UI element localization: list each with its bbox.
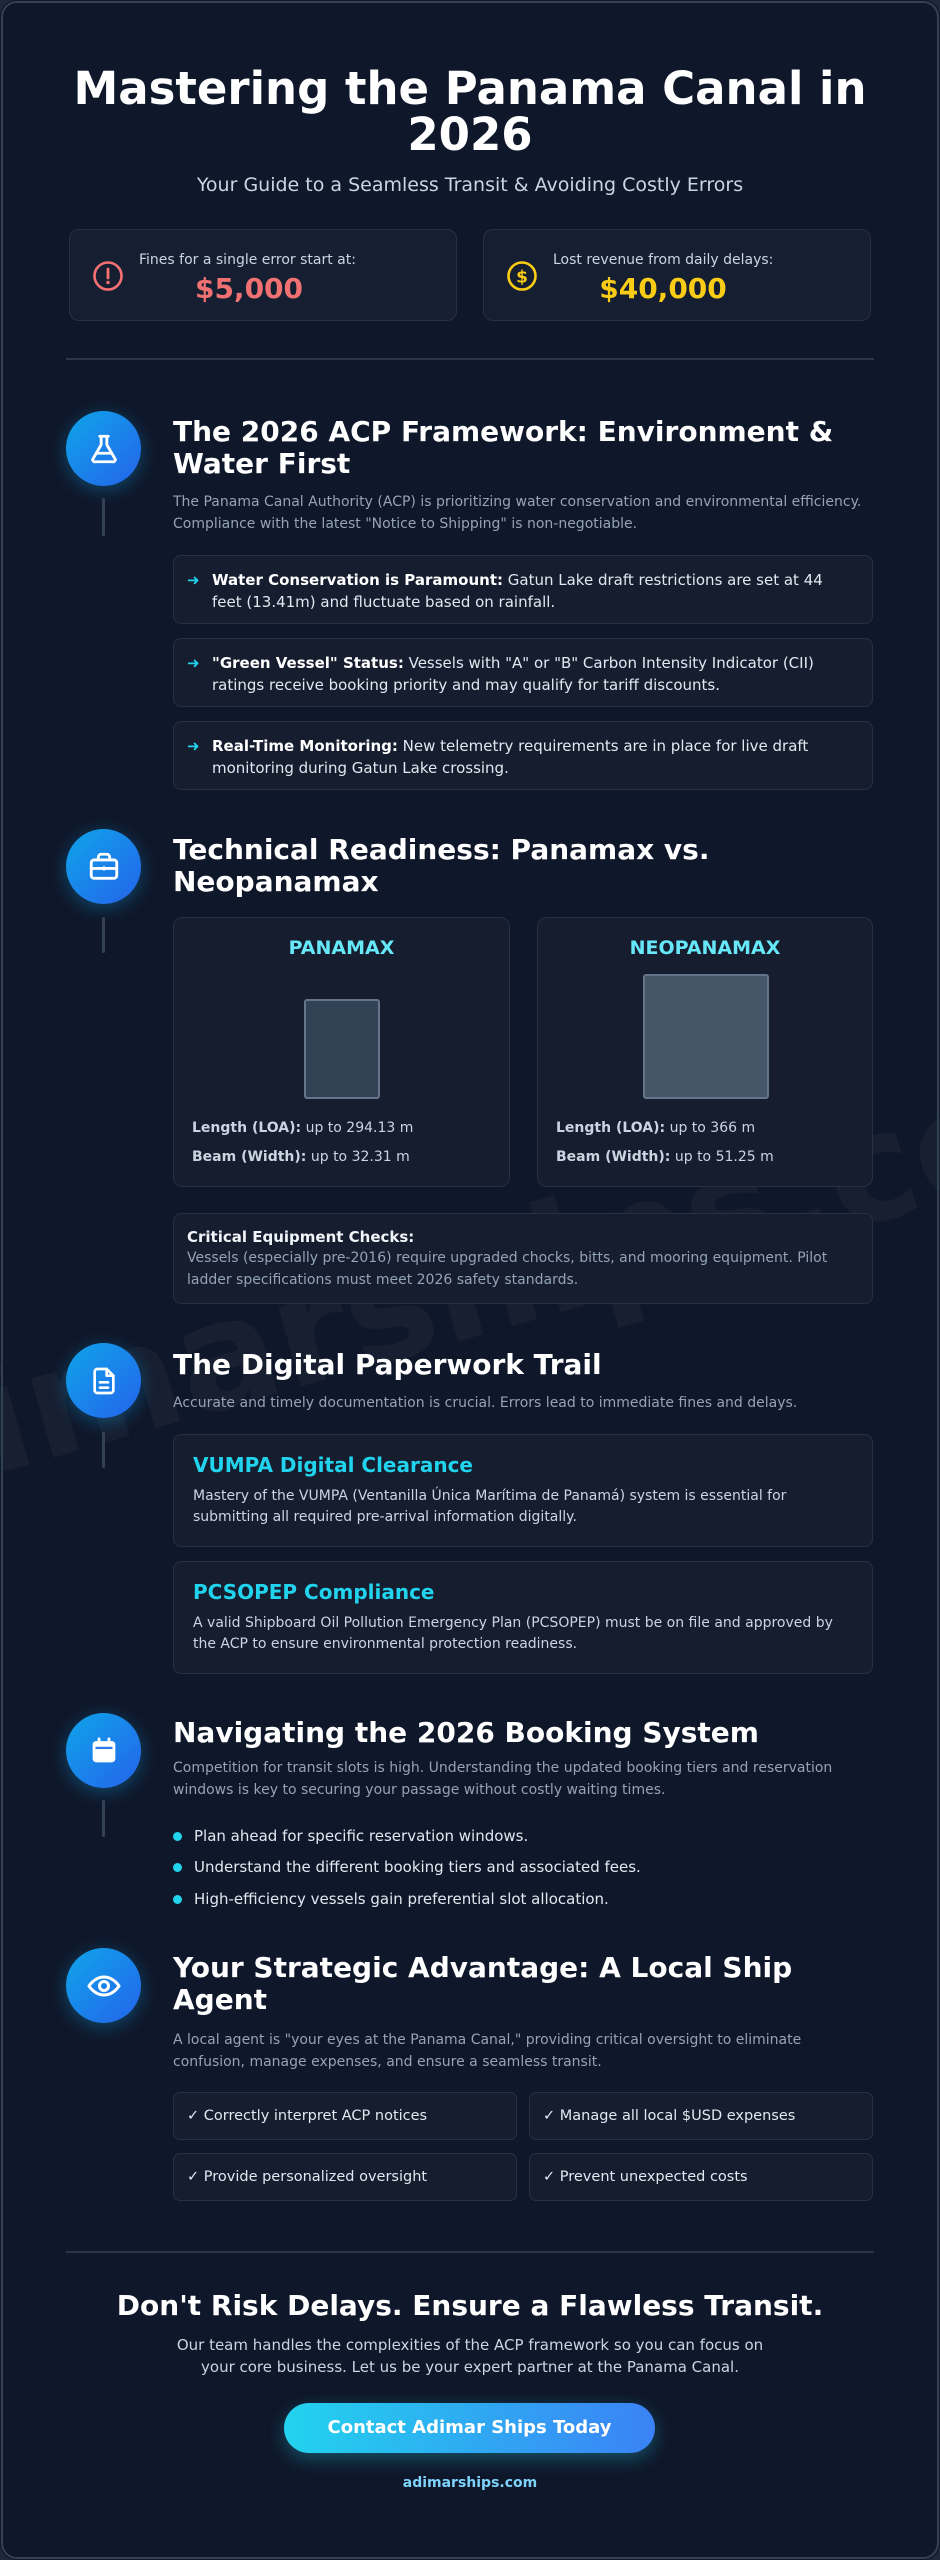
ship size: panamax xyxy=(304,999,380,1099)
icon: alert xyxy=(93,261,123,291)
card: panamax: Length (LOA): up to 294.13 m xyxy=(192,1120,413,1136)
bullet box: green vessel: "Green Vessel" Status: Vessels with "A" or "B" Carbon Intensity Indicator (CII) ratings receive booking priority and may qualify for tariff discounts. xyxy=(212,654,814,694)
callout: critical equipment: Critical Equipment Checks: xyxy=(187,1228,414,1246)
card: panamax: Beam (Width): up to 32.31 m xyxy=(192,1149,410,1165)
card: PCSOPEP xyxy=(173,1561,873,1674)
heading: digital paperwork: The Digital Paperwork Trail xyxy=(173,1348,602,1381)
CTA text: Our team handles the complexities of the ACP framework so you can focus on your core business. Let us be your expert partner at the Panama Canal. xyxy=(177,2336,763,2376)
icon: dollar xyxy=(507,261,537,291)
card: VUMPA: Mastery of the VUMPA (Ventanilla Única Marítima de Panamá) system is essential for submitting all required pre-arrival information digitally. xyxy=(193,1488,786,1525)
card: panamax: PANAMAX xyxy=(289,937,394,959)
grid: agent benefits: ✓ Manage all local $USD expenses xyxy=(543,2108,795,2124)
website link: adimarships.com xyxy=(403,2475,537,2491)
list: booking tips: Understand the different booking tiers and associated fees. xyxy=(194,1858,641,1876)
bullet box: water conservation: ➜ xyxy=(187,571,200,589)
callout: critical equipment xyxy=(173,1213,873,1304)
list: booking tips xyxy=(173,1827,641,1908)
card: panamax xyxy=(173,917,510,1187)
bullet box: green vessel: ➜ xyxy=(187,654,200,672)
icon: flask xyxy=(66,411,141,486)
heading: ACP framework: The 2026 ACP Framework: Environment & Water First xyxy=(173,415,833,480)
icon: calendar xyxy=(66,1713,141,1788)
stat card: revenue xyxy=(483,229,871,321)
text: booking intro: Competition for transit slots is high. Understanding the updated booking tiers and reservation windows is key to securing your passage without costly waiting times. xyxy=(173,1760,832,1798)
heading: technical readiness: Technical Readiness: Panamax vs. Neopanamax xyxy=(173,833,709,898)
card: neopanamax xyxy=(537,917,873,1187)
stat card: fines: $5,000 xyxy=(195,272,303,305)
icon: eye xyxy=(66,1948,141,2023)
card: VUMPA xyxy=(173,1434,873,1547)
bullet box: monitoring xyxy=(173,721,873,790)
heading: local agent: Your Strategic Advantage: A Local Ship Agent xyxy=(173,1951,792,2016)
stat card: fines xyxy=(69,229,457,321)
text: agent intro: A local agent is "your eyes at the Panama Canal," providing critical oversight to eliminate confusion, manage expenses, and ensure a seamless transit. xyxy=(173,2032,801,2070)
bullet box: water conservation: Water Conservation is Paramount: Gatun Lake draft restrictions are set at 44 feet (13.41m) and fluctuate based on rainfall. xyxy=(212,571,823,611)
CTA button: Contact Adimar Ships Today xyxy=(328,2417,612,2438)
bullet box: water conservation xyxy=(173,555,873,624)
title: Mastering the Panama Canal in 2026 xyxy=(73,62,867,161)
grid: agent benefits: ✓ Provide personalized oversight xyxy=(187,2169,427,2185)
card: neopanamax: Length (LOA): up to 366 m xyxy=(556,1120,755,1136)
card: VUMPA: VUMPA Digital Clearance xyxy=(193,1453,473,1477)
text: paperwork intro: Accurate and timely documentation is crucial. Errors lead to immediate fines and delays. xyxy=(173,1395,797,1411)
stat card: revenue: Lost revenue from daily delays: xyxy=(553,252,773,268)
card: neopanamax: Beam (Width): up to 51.25 m xyxy=(556,1149,774,1165)
bullet box: monitoring: Real-Time Monitoring: New telemetry requirements are in place for live draft monitoring during Gatun Lake crossing. xyxy=(212,737,808,777)
card: PCSOPEP: PCSOPEP Compliance xyxy=(193,1580,434,1604)
card: neopanamax: NEOPANAMAX xyxy=(630,937,780,959)
callout: critical equipment: Vessels (especially pre-2016) require upgraded chocks, bitts, and mooring equipment. Pilot ladder specifications must meet 2026 safety standards. xyxy=(187,1250,827,1288)
ship size: neopanamax xyxy=(643,974,769,1099)
list: booking tips: High-efficiency vessels gain preferential slot allocation. xyxy=(194,1890,609,1908)
stat card: fines: Fines for a single error start at: xyxy=(139,252,356,268)
heading: booking system: Navigating the 2026 Booking System xyxy=(173,1716,759,1749)
text: ACP intro: The Panama Canal Authority (ACP) is prioritizing water conservation and environmental efficiency. Compliance with the latest "Notice to Shipping" is non-negotiable. xyxy=(173,494,861,532)
bullet box: green vessel xyxy=(173,638,873,707)
grid: agent benefits xyxy=(173,2092,873,2201)
subtitle: Your Guide to a Seamless Transit & Avoiding Costly Errors xyxy=(197,174,743,196)
CTA heading: Don't Risk Delays. Ensure a Flawless Transit. xyxy=(117,2289,823,2322)
bullet box: monitoring: ➜ xyxy=(187,737,200,755)
card: PCSOPEP: A valid Shipboard Oil Pollution Emergency Plan (PCSOPEP) must be on file and approved by the ACP to ensure environmental protection readiness. xyxy=(193,1615,833,1652)
icon: document xyxy=(66,1343,141,1418)
icon: dollar: $ xyxy=(516,268,528,288)
list: booking tips: Plan ahead for specific reservation windows. xyxy=(194,1827,528,1845)
grid: agent benefits: ✓ Prevent unexpected costs xyxy=(543,2169,748,2185)
stat card: revenue: $40,000 xyxy=(599,272,727,305)
CTA button xyxy=(284,2403,655,2453)
icon: briefcase xyxy=(66,829,141,904)
grid: agent benefits: ✓ Correctly interpret ACP notices xyxy=(187,2108,427,2124)
